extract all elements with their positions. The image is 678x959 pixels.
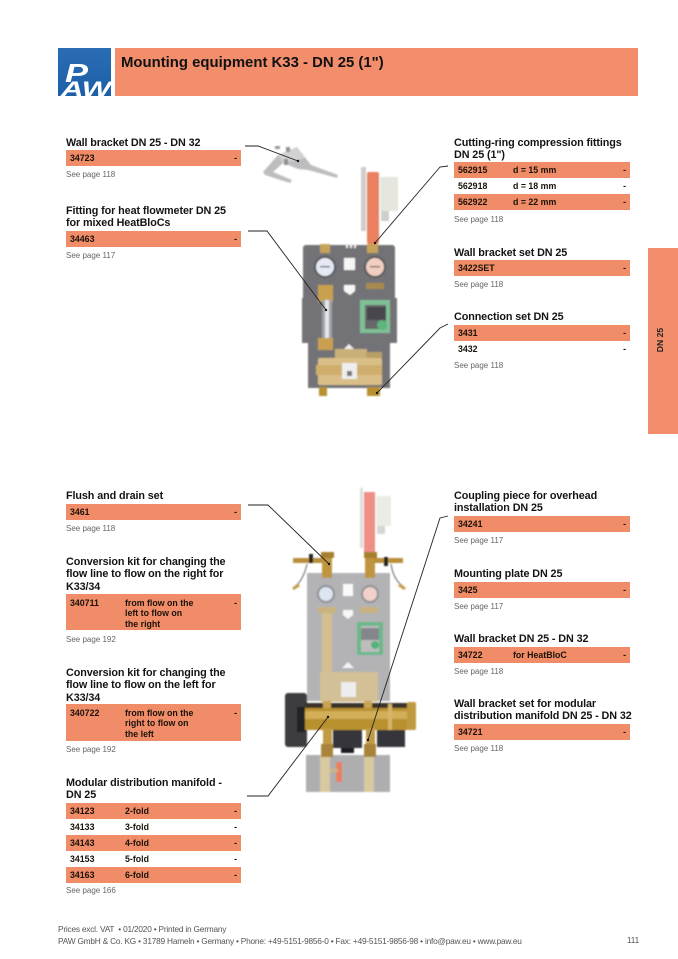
- product row: right to flow on: [125, 718, 189, 728]
- product row: 34123: [70, 806, 94, 816]
- product row: 3-fold: [125, 822, 149, 832]
- heading: Mounting plate DN 25: [454, 568, 562, 580]
- heading: Coupling piece for overhead: [454, 490, 597, 502]
- product row: -: [623, 165, 626, 175]
- product row: the left: [125, 729, 154, 739]
- product row: [70, 822, 237, 832]
- panel: wall bracket for HeatBloC: [454, 632, 630, 676]
- logo: PAW: P: [65, 58, 89, 88]
- heading: flow line to flow on the left for: [66, 679, 216, 691]
- product row: 34163: [70, 870, 94, 880]
- product row: [66, 704, 241, 741]
- heading: Wall bracket DN 25 - DN 32: [454, 632, 588, 644]
- product row: 6-fold: [125, 870, 149, 880]
- product row: -: [234, 507, 237, 517]
- page reference: See page 117: [454, 536, 503, 545]
- product row: -: [234, 598, 237, 608]
- heading: distribution manifold DN 25 - DN 32: [454, 710, 632, 722]
- arrow: connection set leader: [376, 324, 448, 394]
- product row: -: [623, 263, 626, 273]
- product row: [454, 260, 630, 276]
- footer text: [58, 924, 522, 946]
- product row: -: [234, 838, 237, 848]
- icon: wall bracket: [263, 146, 338, 183]
- product row: -: [623, 328, 626, 338]
- product row: -: [234, 870, 237, 880]
- product row: 3432: [458, 344, 478, 354]
- panel: wall bracket set: [454, 246, 630, 289]
- product row: 340711: [70, 598, 99, 608]
- product row: 5-fold: [125, 854, 149, 864]
- footer text: PAW GmbH & Co. KG • 31789 Hameln • Germany • Phone: +49-5151-9856-0 • Fax: +49-5151-9856-98 • info@paw.eu • www.paw.eu: [58, 936, 522, 946]
- heading: Cutting-ring compression fittings: [454, 136, 622, 148]
- product row: 3431: [458, 328, 478, 338]
- product row: [454, 582, 630, 598]
- icon: distribution manifold: [285, 693, 416, 757]
- product row: 34241: [458, 519, 482, 529]
- panel: conversion kit to right: [66, 556, 241, 644]
- product row: 4-fold: [125, 838, 149, 848]
- product row: [454, 325, 630, 341]
- product row: -: [234, 708, 237, 718]
- product row: 340722: [70, 708, 99, 718]
- product row: 3425: [458, 585, 478, 595]
- panel: coupling piece: [454, 490, 630, 545]
- page reference: See page 118: [454, 744, 503, 753]
- product diagram: lower station with manifold: [284, 488, 417, 793]
- product row: for HeatBloC: [513, 650, 567, 660]
- panel: heat flowmeter fitting: [66, 204, 241, 260]
- product row: 2-fold: [125, 806, 149, 816]
- panel: wall bracket: [66, 136, 241, 179]
- panel: cutting-ring fittings: [454, 136, 630, 224]
- page reference: See page 117: [66, 251, 115, 260]
- heading: flow line to flow on the right for: [66, 568, 223, 580]
- icon: pump station: [302, 244, 397, 396]
- heading: Fitting for heat flowmeter DN 25: [66, 204, 226, 216]
- heading: K33/34: [66, 581, 100, 593]
- page reference: See page 118: [66, 170, 115, 179]
- product row: [70, 854, 237, 864]
- product row: [454, 724, 630, 740]
- product diagram: upper station: [262, 145, 398, 398]
- panel: flush and drain set: [66, 490, 241, 533]
- product row: 3461: [70, 507, 90, 517]
- product row: -: [623, 585, 626, 595]
- product row: [458, 344, 626, 354]
- icon: red insulated pipe: [361, 167, 398, 244]
- heading: K33/34: [66, 692, 100, 704]
- footer text: Prices excl. VAT • 01/2020 • Printed in Germany: [58, 924, 226, 934]
- header banner: [115, 48, 638, 96]
- icon: faded lower station: [306, 755, 390, 792]
- icon: faded station plate: [307, 573, 390, 702]
- product row: 562915: [458, 165, 487, 175]
- arrow: flush and drain leader: [248, 505, 330, 565]
- product row: d = 22 mm: [513, 197, 556, 207]
- page reference: See page 118: [454, 280, 503, 289]
- product row: [66, 835, 241, 851]
- product row: [66, 867, 241, 883]
- arrow: wall bracket leader: [245, 146, 299, 162]
- product row: [66, 150, 241, 166]
- logo: PAW: [58, 48, 111, 96]
- product row: -: [234, 806, 237, 816]
- heading: [66, 556, 226, 593]
- panel: mounting plate: [454, 568, 630, 611]
- product row: 34722: [458, 650, 482, 660]
- page reference: See page 166: [66, 886, 116, 895]
- product row: [454, 194, 630, 210]
- page reference: See page 118: [454, 215, 503, 224]
- product row: 34463: [70, 234, 94, 244]
- product row: d = 18 mm: [513, 181, 556, 191]
- product row: from flow on the: [125, 708, 193, 718]
- product row: d = 15 mm: [513, 165, 556, 175]
- product row: 34721: [458, 727, 482, 737]
- product row: [454, 516, 630, 532]
- product row: -: [234, 153, 237, 163]
- product row: 562922: [458, 197, 487, 207]
- product row: [66, 231, 241, 247]
- page reference: See page 117: [454, 602, 503, 611]
- heading: [66, 666, 226, 704]
- side tab label: DN 25: [655, 328, 665, 352]
- heading: Wall bracket set DN 25: [454, 246, 567, 258]
- page reference: See page 118: [454, 667, 503, 676]
- page reference: See page 192: [66, 635, 116, 644]
- heading: for mixed HeatBloCs: [66, 217, 170, 229]
- icon: flush and drain valves: [292, 552, 406, 590]
- title: Mounting equipment K33 - DN 25 (1"): [121, 54, 384, 70]
- product row: -: [234, 234, 237, 244]
- panel: modular distribution manifold: [66, 776, 241, 895]
- page reference: See page 118: [66, 524, 115, 533]
- arrow: modular manifold leader: [247, 716, 329, 796]
- arrow: compression fittings leader: [374, 166, 448, 244]
- product row: [454, 647, 630, 663]
- product row: -: [623, 519, 626, 529]
- product row: -: [234, 822, 237, 832]
- heading: Modular distribution manifold -: [66, 776, 222, 788]
- product row: -: [623, 181, 626, 191]
- heading: DN 25 (1"): [454, 149, 505, 161]
- side tab: DN 25: [648, 248, 678, 434]
- heading: Connection set DN 25: [454, 310, 564, 322]
- heading: Conversion kit for changing the: [66, 666, 225, 678]
- heading: [454, 490, 597, 514]
- product row: 562918: [458, 181, 487, 191]
- product row: left to flow on: [125, 608, 182, 618]
- heading: [66, 776, 222, 801]
- product row: -: [623, 650, 626, 660]
- page number: 111: [627, 935, 639, 945]
- product row: 34143: [70, 838, 94, 848]
- product row: -: [623, 344, 626, 354]
- panel: wall bracket set for manifold: [454, 698, 632, 753]
- heading: [66, 204, 226, 229]
- product row: from flow on the: [125, 598, 193, 608]
- arrow: heat flowmeter leader: [248, 231, 327, 311]
- heading: installation DN 25: [454, 502, 543, 514]
- heading: Wall bracket DN 25 - DN 32: [66, 136, 200, 148]
- heading: Wall bracket set for modular: [454, 698, 596, 710]
- panel: connection set: [454, 310, 630, 370]
- product row: [66, 594, 241, 630]
- product row: 3422SET: [458, 263, 495, 273]
- heading: DN 25: [66, 789, 96, 801]
- product row: -: [623, 197, 626, 207]
- product row: [66, 803, 241, 819]
- icon: faded pipe: [360, 488, 391, 554]
- product row: 34153: [70, 854, 94, 864]
- product row: [66, 504, 241, 520]
- product row: 34133: [70, 822, 94, 832]
- product row: 34723: [70, 153, 94, 163]
- product row: [454, 162, 630, 178]
- heading: Flush and drain set: [66, 490, 163, 502]
- heading: Conversion kit for changing the: [66, 556, 225, 568]
- page reference: See page 118: [454, 361, 503, 370]
- page reference: See page 192: [66, 745, 116, 754]
- product row: -: [623, 727, 626, 737]
- heading: [454, 698, 632, 722]
- arrow: coupling piece leader: [367, 516, 448, 741]
- panel: conversion kit to left: [66, 666, 241, 754]
- product row: [458, 181, 626, 191]
- heading: [454, 136, 622, 161]
- product row: the right: [125, 619, 160, 629]
- product row: -: [234, 854, 237, 864]
